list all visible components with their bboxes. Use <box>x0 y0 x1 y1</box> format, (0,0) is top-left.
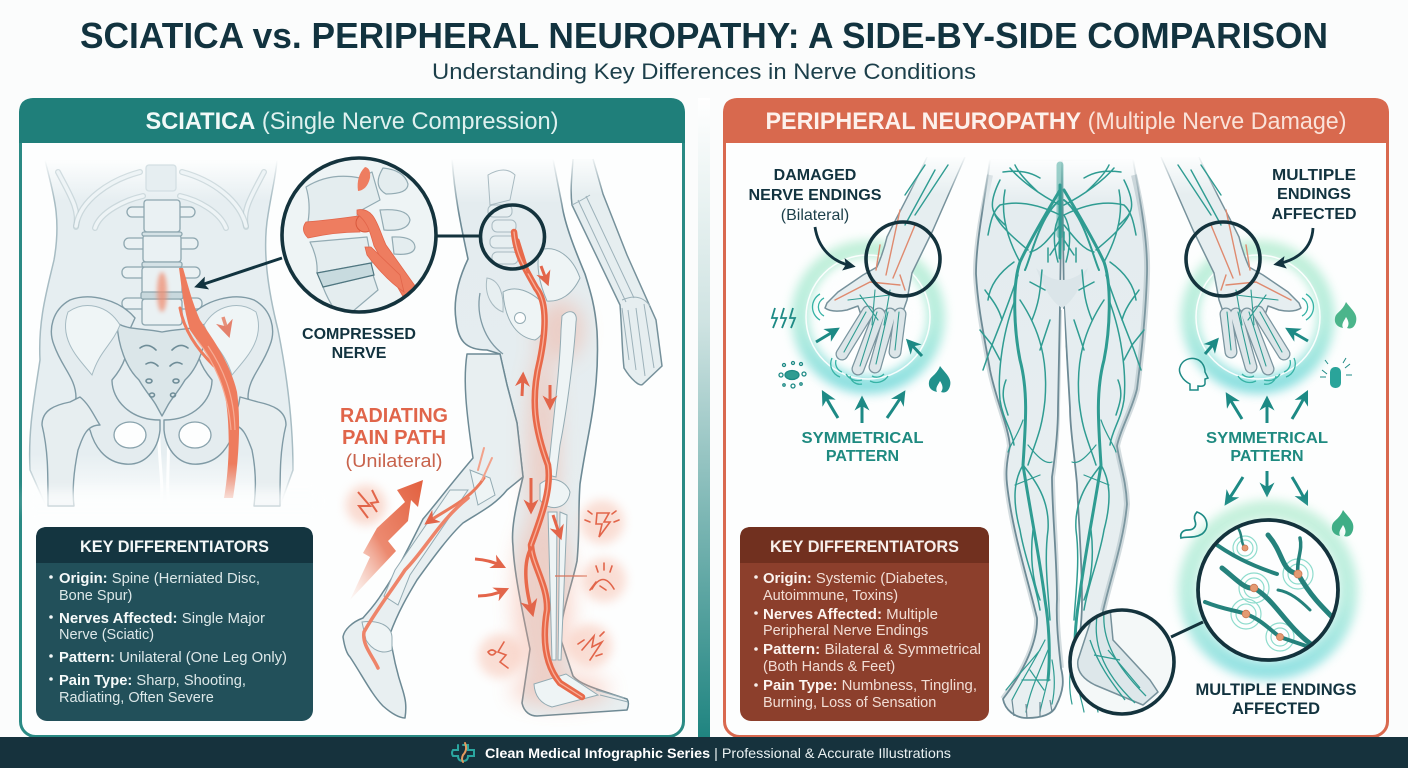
pelvic openings <box>114 422 211 448</box>
panel frame <box>20 100 684 736</box>
icon: head <box>1179 358 1208 390</box>
box list: Burning, Loss of Sensation <box>763 695 936 711</box>
icon: flame <box>929 366 950 392</box>
toes <box>1012 700 1052 718</box>
vertebrae in close-up <box>306 168 415 312</box>
arrow: lens to spine <box>198 258 282 286</box>
connector line <box>437 234 480 238</box>
curved arrow <box>1277 228 1313 264</box>
label: radiating pain path: PAIN PATH <box>342 427 446 449</box>
box list: Origin: Spine (Herniated Disc, <box>59 571 260 587</box>
label: compressed nerve: NERVE <box>332 345 387 362</box>
magnifier <box>866 222 940 296</box>
sciatic nerve <box>179 268 239 498</box>
footer bar <box>0 737 1408 768</box>
label: compressed nerve <box>302 326 416 362</box>
box header <box>36 527 313 563</box>
fingers <box>1178 165 1291 369</box>
small lens on spine <box>480 205 544 269</box>
tingling arcs <box>1238 294 1314 384</box>
foot magnifier <box>1070 608 1174 714</box>
label: multiple endings bottom <box>1196 681 1356 718</box>
box list: Autoimmune, Toxins) <box>763 588 898 604</box>
right leg shading <box>1103 175 1147 611</box>
box <box>740 527 989 721</box>
label: symmetrical pattern left: SYMMETRICAL <box>802 430 924 447</box>
label: symmetrical pattern right <box>1206 430 1328 465</box>
glow ring <box>1190 249 1326 385</box>
teal arrows <box>1205 330 1308 502</box>
curved arrow <box>815 227 852 266</box>
label: multiple endings top: ENDINGS <box>1277 186 1351 203</box>
illustration: torso and pelvis skeleton <box>26 160 320 512</box>
label: multiple endings bottom: AFFECTED <box>1232 700 1320 718</box>
box <box>36 527 313 721</box>
arm and palm <box>1161 157 1301 320</box>
box list <box>49 571 287 706</box>
magnified nerve endings <box>1171 510 1348 670</box>
panel header <box>723 98 1389 143</box>
box list: Pattern: Bilateral & Symmetrical <box>763 642 981 658</box>
glow ring <box>800 249 936 385</box>
nerve direction arrows <box>475 266 560 596</box>
box list: (Both Hands & Feet) <box>763 659 895 675</box>
label: multiple endings top <box>1272 167 1356 223</box>
panel heading: PERIPHERAL NEUROPATHY (Multiple Nerve Damage) <box>766 108 1346 135</box>
footer text: Clean Medical Infographic Series | Professional & Accurate Illustrations <box>485 745 951 761</box>
left leg <box>976 159 1063 718</box>
center divider strip <box>698 98 710 738</box>
panel: peripheral neuropathy <box>723 98 1389 736</box>
box list: Nerves Affected: Multiple <box>763 607 938 623</box>
label: symmetrical pattern left <box>802 430 924 465</box>
box list: Bone Spur) <box>59 588 132 604</box>
box list: Nerve (Sciatic) <box>59 627 154 643</box>
sacrum detail <box>140 345 188 397</box>
box list: Pain Type: Numbness, Tingling, <box>763 678 977 694</box>
radiating nerve path <box>364 232 582 697</box>
box list <box>754 571 981 711</box>
arm and palm <box>825 157 965 320</box>
illustration: walking leg figure <box>343 159 662 718</box>
bent back leg <box>343 354 523 718</box>
label: symmetrical pattern right: SYMMETRICAL <box>1206 430 1328 447</box>
icon: flame <box>1335 302 1356 328</box>
herniation glow <box>157 272 167 312</box>
box list: Nerves Affected: Single Major <box>59 611 265 627</box>
label: multiple endings top: AFFECTED <box>1272 206 1356 223</box>
nerve branches <box>1205 528 1340 648</box>
box header <box>740 527 989 563</box>
connector line <box>1171 622 1203 637</box>
spine <box>122 165 202 325</box>
title: SCIATICA vs. PERIPHERAL NEUROPATHY: A SIDE-BY-SIDE COMPARISON <box>80 15 1328 56</box>
box list: Pain Type: Sharp, Shooting, <box>59 673 246 689</box>
nerve network <box>980 165 1144 712</box>
skeleton in figure <box>362 249 628 707</box>
body and standing leg <box>452 159 628 716</box>
subtitle: Understanding Key Differences in Nerve Conditions <box>432 59 976 84</box>
right leg <box>1062 159 1157 712</box>
label: radiating pain path <box>340 405 448 471</box>
femurs <box>42 397 286 506</box>
label: compressed nerve: COMPRESSED <box>302 326 416 343</box>
icons: pain symbols <box>478 500 626 678</box>
label: damaged nerve endings <box>748 167 882 224</box>
magnifier <box>1186 222 1260 296</box>
icon: tingle <box>772 308 795 328</box>
icon: device <box>1320 358 1352 388</box>
box list: Radiating, Often Severe <box>59 690 214 706</box>
box list: Origin: Systemic (Diabetes, <box>763 571 948 587</box>
magnifier fill <box>1199 521 1337 659</box>
left leg shading <box>976 175 1061 699</box>
icon: medical cross <box>452 743 474 762</box>
fingers <box>835 165 948 369</box>
icon: stomach <box>1181 512 1207 538</box>
buttock crease <box>479 293 503 354</box>
key differentiators: sciatica <box>36 527 313 721</box>
label: multiple endings bottom: MULTIPLE ENDINGS <box>1196 681 1356 699</box>
icon: flame lower <box>1332 510 1353 536</box>
label: multiple endings top: MULTIPLE <box>1272 167 1356 184</box>
gap between legs <box>1056 309 1079 700</box>
panel header <box>19 98 685 143</box>
nerve nodes <box>1242 545 1302 640</box>
icon: small bolts <box>346 485 386 525</box>
small pain arrow <box>223 317 228 333</box>
box list: Peripheral Nerve Endings <box>763 623 928 639</box>
panel heading: SCIATICA (Single Nerve Compression) <box>146 108 558 135</box>
box heading: KEY DIFFERENTIATORS <box>80 538 269 556</box>
left hand group <box>772 157 965 423</box>
box heading: KEY DIFFERENTIATORS <box>770 538 959 556</box>
box list: Pattern: Unilateral (One Leg Only) <box>59 650 287 666</box>
label: damaged nerve endings: NERVE ENDINGS <box>748 187 882 204</box>
label: damaged nerve endings: (Bilateral) <box>781 207 849 224</box>
label: radiating pain path: RADIATING <box>340 405 448 427</box>
label: damaged nerve endings: DAMAGED <box>774 167 856 184</box>
teal arrows <box>816 330 922 423</box>
tingling arcs <box>812 294 888 384</box>
glow ring <box>1188 510 1348 670</box>
illustration: legs with nerve network <box>976 159 1157 718</box>
panel: sciatica <box>19 98 685 736</box>
trunk <box>1056 165 1064 235</box>
magnifier: compressed nerve <box>282 158 436 312</box>
glow dots <box>1231 536 1313 651</box>
label: radiating pain path: (Unilateral) <box>346 451 442 471</box>
icon: large lightning arrow <box>350 480 423 600</box>
key differentiators: neuropathy <box>740 527 989 721</box>
torso silhouette <box>30 160 293 506</box>
panel frame <box>724 100 1388 736</box>
herniated disc and nerve <box>303 216 360 238</box>
arm <box>571 159 662 385</box>
glow along nerve <box>510 300 610 706</box>
label: symmetrical pattern left: PATTERN <box>826 448 899 465</box>
groin <box>1036 268 1088 308</box>
ribs <box>58 172 264 228</box>
right hand group <box>1161 157 1356 502</box>
label: symmetrical pattern right: PATTERN <box>1230 448 1304 465</box>
pelvis <box>51 297 273 464</box>
icon: sensory <box>779 362 806 388</box>
